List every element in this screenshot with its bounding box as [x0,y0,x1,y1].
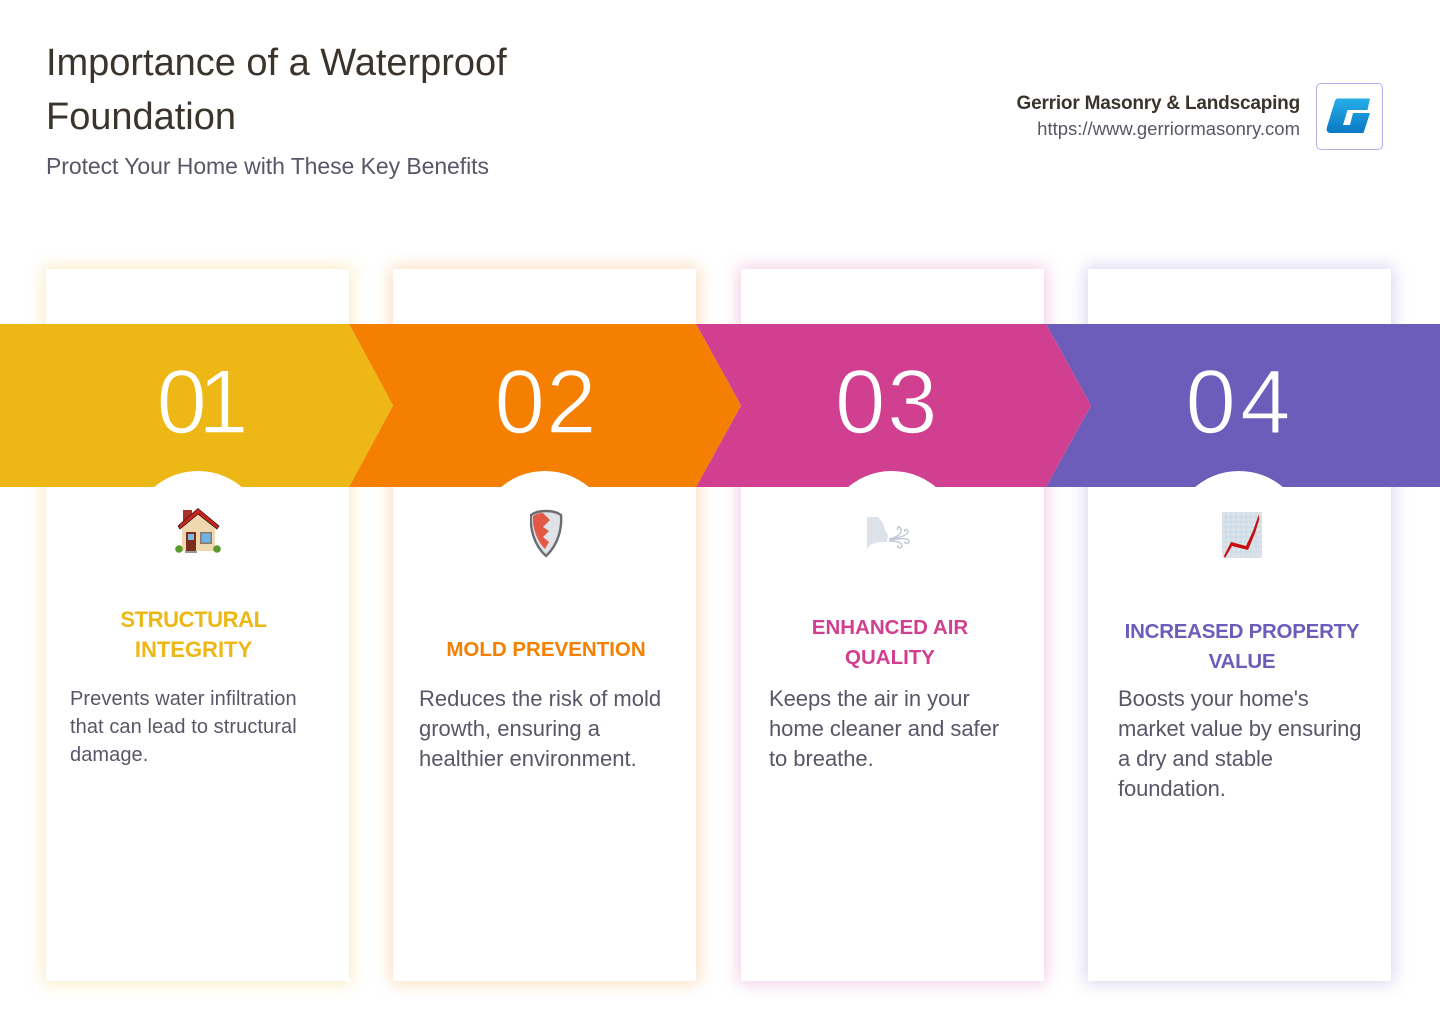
card 3 text: home cleaner and safer [769,716,999,741]
logo [1316,83,1383,150]
card 1 text: damage. [70,744,148,766]
card 2 heading: MOLD PREVENTION [446,638,646,661]
card 3 text: Keeps the air in your [769,686,970,711]
card 3 text: to breathe. [769,746,874,771]
title [46,42,507,138]
card 1 heading [120,607,267,662]
card 4 text: market value by ensuring [1118,716,1361,741]
card 2 text [419,686,661,771]
arcs [130,471,1307,607]
card 1 heading: STRUCTURAL [120,607,267,632]
card 3 heading: QUALITY [845,646,935,669]
card 4 heading [1125,620,1360,673]
icon: blowing face [867,517,910,550]
card 4 text [1118,686,1361,801]
card 4 text: Boosts your home's [1118,686,1309,711]
card 4 text: a dry and stable [1118,746,1273,771]
card 1 text: that can lead to structural [70,716,297,738]
chevron 4 [1046,324,1440,487]
icon: chart increasing [1222,512,1262,558]
number 02: 02 [494,352,598,453]
icon: house [175,508,221,553]
card 1 text [70,688,297,766]
card 1 text: Prevents water infiltration [70,688,297,710]
chevron band [0,324,1440,487]
card 2 text: Reduces the risk of mold [419,686,661,711]
card 4 [1088,269,1391,981]
number 03: 03 [835,352,939,453]
subtitle: Protect Your Home with These Key Benefits [46,153,489,179]
number 04: 04 [1185,352,1295,453]
card 4 heading: VALUE [1209,650,1275,673]
chevron 3 [696,324,1091,487]
card 2 [393,269,696,981]
card 4 heading: INCREASED PROPERTY [1125,620,1359,643]
card 3 [741,269,1044,981]
title: Foundation [46,96,236,138]
card 3 heading [812,616,968,669]
chevron 1 [0,324,393,487]
card 1 [46,269,349,981]
card 1 heading: INTEGRITY [135,637,252,662]
brand name: Gerrior Masonry & Landscaping [1016,93,1300,114]
card 3 heading: ENHANCED AIR [812,616,968,639]
card 4 text: foundation. [1118,776,1226,801]
card 2 text: growth, ensuring a [419,716,600,741]
brand url: https://www.gerriormasonry.com [1037,118,1300,139]
card 2 text: healthier environment. [419,746,637,771]
number 01: 01 [156,352,240,453]
card 3 text [769,686,999,771]
chevron 2 [349,324,741,487]
icon: shield [530,510,562,558]
title: Importance of a Waterproof [46,42,507,84]
